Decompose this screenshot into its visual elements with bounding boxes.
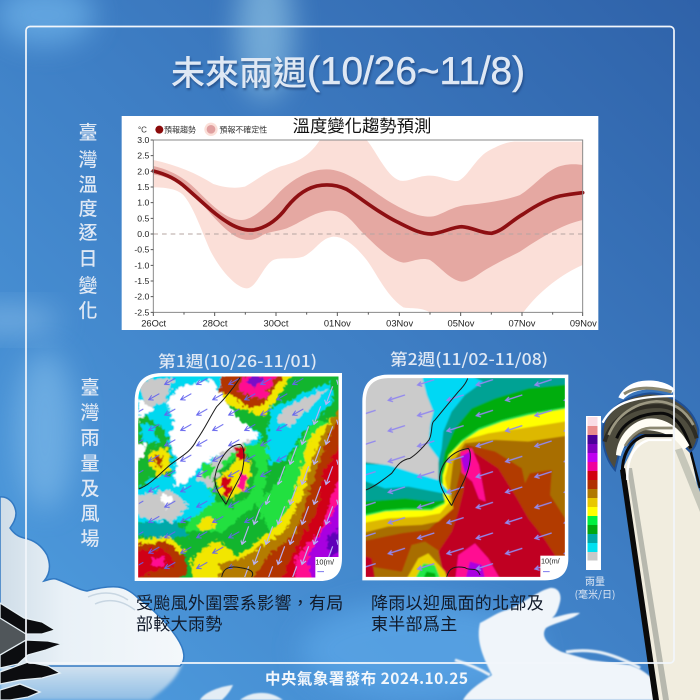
rainfall colour scale (586, 416, 601, 570)
y axis labels: -2.5 (134, 307, 150, 317)
chart title: 溫度變化趨勢預測 (293, 112, 431, 137)
x axis labels: 09Nov (570, 318, 597, 328)
cloud: lower left (0, 497, 283, 700)
x axis labels: 28Oct (203, 318, 228, 328)
y axis labels: -1.5 (134, 276, 150, 286)
rainfall unit label: 雨量 (585, 573, 605, 588)
legend: °C (138, 126, 147, 135)
rainfall unit label: (毫米/日) (575, 586, 615, 601)
side label: rain and wind: 量 (80, 449, 100, 476)
week 1 wind scale (315, 557, 338, 578)
week 2 heading: 第2週(11/02-11/08) (390, 346, 548, 370)
panel: temperature trend chart (122, 112, 598, 330)
x axis labels: 01Nov (324, 318, 351, 328)
week 1 coastlines (139, 378, 253, 577)
band: inner uncertainty (153, 164, 583, 282)
title: (10/26~11/8) (307, 50, 525, 93)
side label: rain and wind: 雨 (80, 423, 100, 450)
side label: temperature: 變 (78, 271, 98, 298)
side label: temperature: 日 (78, 244, 98, 271)
illustration: lighthouse (603, 380, 700, 700)
caption: week 1: 部較大雨勢 (136, 610, 222, 635)
side label: rain and wind: 臺 (80, 373, 100, 400)
title: 未來兩週 (171, 46, 307, 95)
lighthouse cap (603, 380, 698, 480)
y axis labels: 0.0 (137, 229, 150, 239)
x axis labels (141, 318, 597, 328)
rainfall bands (362, 445, 568, 582)
y axis labels: 2.0 (137, 166, 150, 176)
lighthouse column (622, 434, 700, 700)
map: week 2 rainfall and wind (362, 375, 568, 582)
side label: temperature: 灣 (78, 145, 98, 172)
y axis labels: -2.0 (134, 292, 150, 302)
y axis labels (134, 135, 150, 317)
y axis labels: 1.5 (137, 182, 150, 192)
side label: temperature: 度 (78, 194, 98, 221)
title (171, 46, 525, 95)
side label: temperature: 化 (78, 296, 98, 323)
x axis labels: 03Nov (386, 318, 413, 328)
legend: 預報不確定性 (219, 125, 267, 136)
zero line (153, 232, 583, 235)
x axis labels: 30Oct (264, 318, 289, 328)
week 2 wind scale (540, 556, 566, 578)
side label: rain and wind: 場 (80, 524, 100, 551)
map: week 1 rainfall and wind (130, 368, 350, 585)
week 2 coastlines (366, 378, 480, 577)
side label: temperature: 臺 (78, 118, 98, 145)
side label: rain and wind: 及 (80, 474, 100, 501)
week 1 wind arrows (138, 378, 304, 570)
caption: week 2: 東半部爲主 (371, 610, 458, 635)
caption: week 1: 受颱風外圍雲系影響，有局 (136, 589, 344, 614)
side label: temperature: 逐 (78, 218, 98, 245)
illustration: black feathers (0, 603, 62, 700)
y axis labels: -0.5 (134, 245, 150, 255)
week 2 wind arrows (366, 379, 565, 571)
week 2 wind scale: 10(m/ (541, 557, 561, 566)
caption: week 2: 降雨以迎風面的北部及 (371, 589, 544, 614)
x axis labels: 07Nov (509, 318, 536, 328)
band: outer uncertainty (153, 140, 583, 312)
side label: rain and wind: 風 (80, 499, 100, 526)
x axis labels: 05Nov (448, 318, 475, 328)
trend line (153, 171, 583, 234)
axes (153, 140, 583, 312)
footer: issuer and date: 中央氣象署發布 2024.10.25 (265, 667, 468, 689)
legend (138, 123, 267, 136)
x axis labels: 26Oct (141, 318, 167, 328)
y axis labels: -1.0 (134, 260, 150, 270)
legend: 預報趨勢 (164, 125, 196, 136)
side label: rain and wind: 灣 (80, 398, 100, 425)
y axis labels: 2.5 (137, 151, 150, 161)
side label: temperature: 溫 (78, 170, 98, 197)
week 1 heading: 第1週(10/26-11/01) (158, 348, 317, 372)
week 1 wind scale: 10(m/ (315, 557, 335, 566)
cloud: lower right (455, 588, 662, 700)
y axis labels: 0.5 (137, 213, 150, 223)
y axis labels: 3.0 (137, 135, 150, 145)
y axis labels: 1.0 (137, 198, 150, 208)
